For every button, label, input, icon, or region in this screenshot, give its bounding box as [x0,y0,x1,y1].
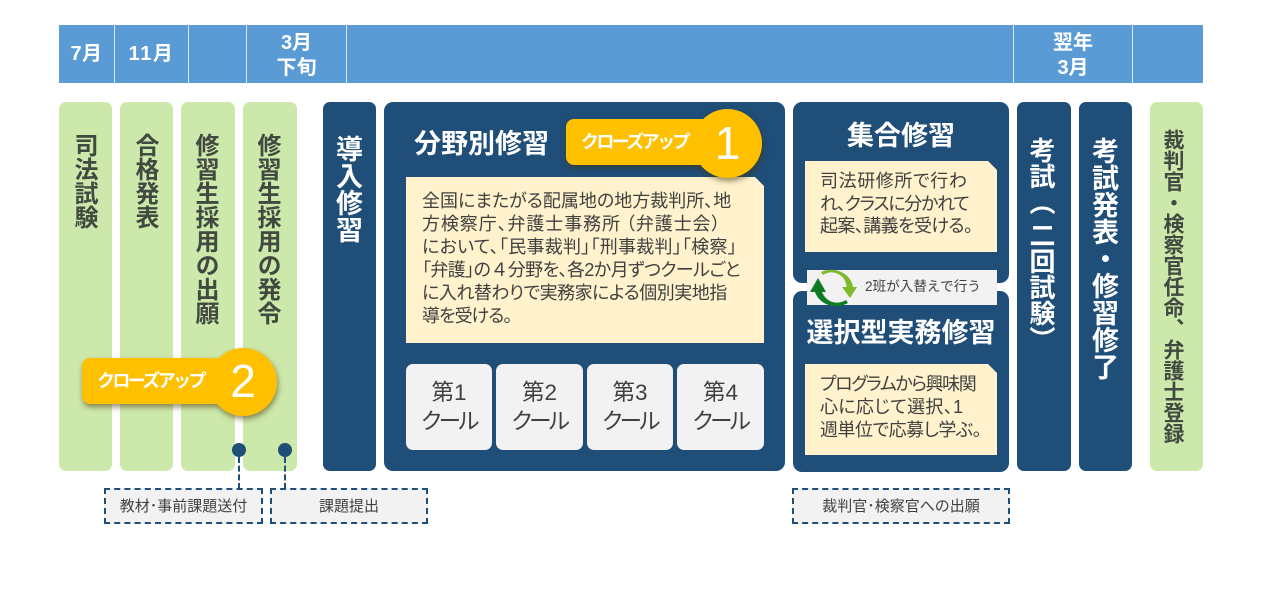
cool 3 [587,364,673,450]
description note [805,161,997,252]
month: 3月下旬: 3月 [281,32,312,54]
month: 翌年3月: 3月 [1057,57,1089,79]
heading: 分野別修習: 分野別修習 [414,129,549,159]
callout: 裁判官・検察官への出願: 裁判官･検察官への出願 [822,498,980,515]
description note: 起案、講義を受ける。 [820,216,972,236]
marker dot 2 [278,443,292,457]
badge label: クローズアップ [97,371,204,391]
marker line 1 [238,457,240,489]
month: 11月: 11月 [129,43,174,65]
cool 1: 第1 [431,380,466,405]
cool 4 [677,364,764,450]
step: 修習生採用の出願 [181,102,235,471]
step: 司法試験: 司法試験 [70,133,97,229]
cool 3: クール [602,409,658,434]
description note: において、「民事裁判」「刑事裁判」「検察」 [422,237,737,257]
callout: 課題提出: 課題提出 [319,498,379,515]
cool 4: 第4 [703,380,738,405]
cool 2 [496,364,583,450]
callout: 課題提出 [270,488,428,524]
cool 1: クール [421,409,477,434]
description note: 週単位で応募し学ぶ。 [820,420,981,440]
step: 修習生採用の発令: 修習生採用の発令 [253,133,280,325]
badge: クローズアップ 1 [564,109,766,185]
badge bar [566,119,736,165]
step: 裁判官・検察官任命、弁護士登録: 裁判官・検察官任命、弁護士登録 [1161,129,1184,444]
badge circle with number 1 [693,109,762,178]
icon: rotation arrows [810,270,857,306]
marker dot 1 [232,443,246,457]
callout: 教材・事前課題送付: 教材･事前課題送付 [120,498,247,515]
badge circle with number 2: 2 [230,355,256,407]
description note: 司法研修所で行わ [820,171,968,191]
month: 翌年3月 [1014,25,1132,83]
step: 修習生採用の発令 [243,102,297,471]
description note: 全国にまたがる配属地の地方裁判所、地 [422,191,731,211]
badge circle with number 1: 1 [715,117,740,169]
badge: クローズアップ 2 [79,347,282,423]
panel: 集合修習 [793,102,1009,283]
heading: 集合修習: 集合修習 [847,121,955,151]
description note: れ、クラスに分かれて [820,194,969,214]
panel: 分野別修習 [384,102,785,471]
callout: 裁判官・検察官への出願 [792,488,1010,524]
step: 考試発表・修習修了: 考試発表・修習修了 [1088,137,1118,380]
month: 11月 [115,25,188,83]
badge label: クローズアップ [581,132,688,152]
cool 2: 第2 [522,380,557,405]
marker line 2 [284,457,286,489]
cool 2: クール [512,409,567,434]
description note: 方検察庁、弁護士事務所 （弁護士会） [422,214,721,234]
cool 3: 第3 [612,380,648,405]
step: 導入修習: 導入修習 [332,135,362,243]
step: 考試発表・修習修了 [1079,102,1132,471]
month: 翌年3月: 翌年 [1053,32,1093,54]
cool 4: クール [693,409,748,434]
description note [805,364,997,455]
blank last cell [1133,25,1203,83]
blank period cell [347,25,1013,83]
step: 合格発表 [120,102,173,471]
rotation label: 2班が入替えで行う [865,279,981,294]
description note [406,177,764,343]
step: 考試（二回試験）: 考試 （ 二回試験） [1026,137,1056,352]
cool 1 [406,364,492,450]
month: 3月下旬: 下旬 [276,57,316,79]
month: 3月下旬 [247,25,346,83]
step: 合格発表: 合格発表 [131,133,158,229]
step: 導入修習 [323,102,376,471]
callout: 教材・事前課題送付 [104,488,263,524]
step: 裁判官・検察官任命、弁護士登録 [1150,102,1203,471]
panel: 選択型実務修習 [793,291,1009,472]
description note: プログラムから興味関 [820,374,975,394]
badge bar [82,358,252,404]
description note: 「弁護」の４分野を、各2か月ずつクールごと [422,260,740,280]
description note: 心に応じて選択、1 [820,397,963,417]
heading: 選択型実務修習: 選択型実務修習 [806,318,996,348]
badge circle with number 2 [209,348,277,416]
step: 修習生採用の出願: 修習生採用の出願 [191,133,218,325]
step: 考試（二回試験） [1017,102,1071,471]
timeline header bar [59,25,1203,83]
description note: 導を受ける。 [422,306,511,326]
month: 7月 [59,25,114,83]
blank month cell [189,25,246,83]
rotation label [807,270,997,305]
step: 司法試験 [59,102,112,471]
month: 7月: 7月 [70,43,103,65]
description note: に入れ替わりで実務家による個別実地指 [422,283,727,303]
